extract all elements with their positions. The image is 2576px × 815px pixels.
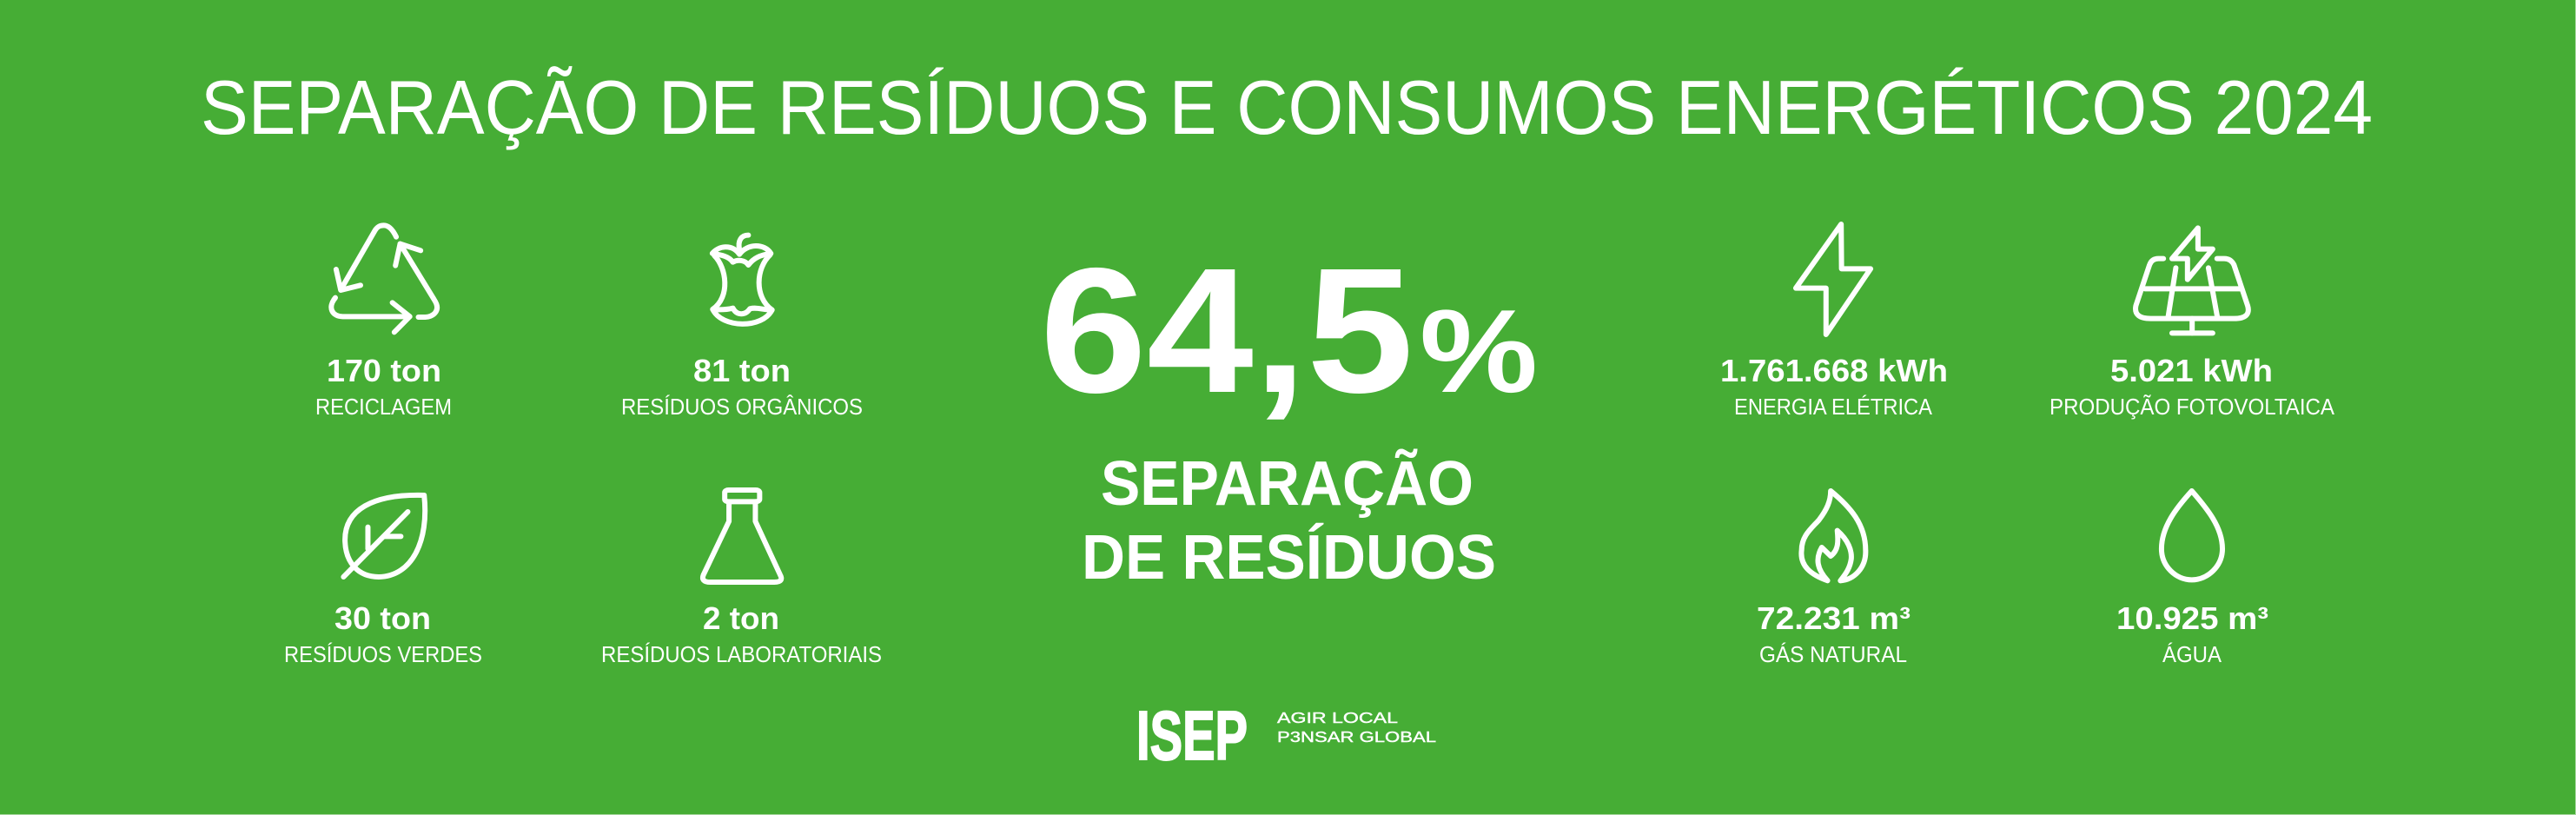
icon: flame xyxy=(1801,491,1865,580)
value: electricity: 1.761.668 kWh xyxy=(1720,353,1948,388)
logo wordmark: ISEP xyxy=(1136,697,1248,774)
metric: laboratory waste xyxy=(601,490,882,667)
label: reciclagem: RECICLAGEM xyxy=(315,394,452,420)
metric: water xyxy=(2116,491,2268,667)
value: water: 10.925 m³ xyxy=(2116,600,2268,636)
logo: ISEP with tagline xyxy=(1136,697,1436,774)
value: 81 ton: 81 ton xyxy=(693,353,791,388)
icon: flask xyxy=(703,490,781,582)
value: 30 ton: 30 ton xyxy=(334,600,431,636)
metric: natural gas xyxy=(1757,491,1910,667)
metric: recycling xyxy=(315,225,452,420)
percent sign: % xyxy=(1420,285,1538,417)
label: energia elétrica: ENERGIA ELÉTRICA xyxy=(1734,394,1933,420)
value: natural gas: 72.231 m³ xyxy=(1757,600,1910,636)
metric: organic waste xyxy=(621,235,863,420)
headline label line 2: DE RESÍDUOS xyxy=(1082,523,1496,593)
panel: energy metrics xyxy=(1720,224,2335,667)
title: SEPARAÇÃO DE RESÍDUOS E CONSUMOS ENERGÉTICOS 2024 xyxy=(201,64,2373,150)
tagline line 2: P3NSAR GLOBAL xyxy=(1277,728,1436,745)
label: resíduos laboratoriais: RESÍDUOS LABORATORIAIS xyxy=(601,641,882,667)
metric: photovoltaic production xyxy=(2050,228,2335,420)
big number: 64,5 xyxy=(1040,231,1414,430)
label: resíduos verdes: RESÍDUOS VERDES xyxy=(284,641,482,667)
icon: solar panel xyxy=(2136,228,2248,333)
value: 170 ton: 170 ton xyxy=(327,353,441,388)
icon: leaf xyxy=(343,495,425,577)
label: produção fotovoltaica: PRODUÇÃO FOTOVOLTAICA xyxy=(2050,394,2335,420)
icon: recycling arrows xyxy=(331,225,437,332)
label: gás natural: GÁS NATURAL xyxy=(1759,641,1907,667)
label: água: ÁGUA xyxy=(2162,641,2222,667)
panel: headline statistic xyxy=(1040,231,1538,593)
value: photovoltaic: 5.021 kWh xyxy=(2110,353,2273,388)
metric: electricity xyxy=(1720,224,1948,420)
value: 2 ton: 2 ton xyxy=(703,600,779,636)
tagline line 1: AGIR LOCAL xyxy=(1277,709,1398,726)
icon: apple core xyxy=(712,235,772,324)
metric: green waste xyxy=(284,495,482,667)
icon: lightning bolt xyxy=(1796,224,1871,335)
headline label line 1: SEPARAÇÃO xyxy=(1101,448,1473,519)
icon: water drop xyxy=(2162,491,2222,580)
panel: waste metrics xyxy=(284,225,882,667)
label: resíduos orgânicos: RESÍDUOS ORGÂNICOS xyxy=(621,394,863,420)
